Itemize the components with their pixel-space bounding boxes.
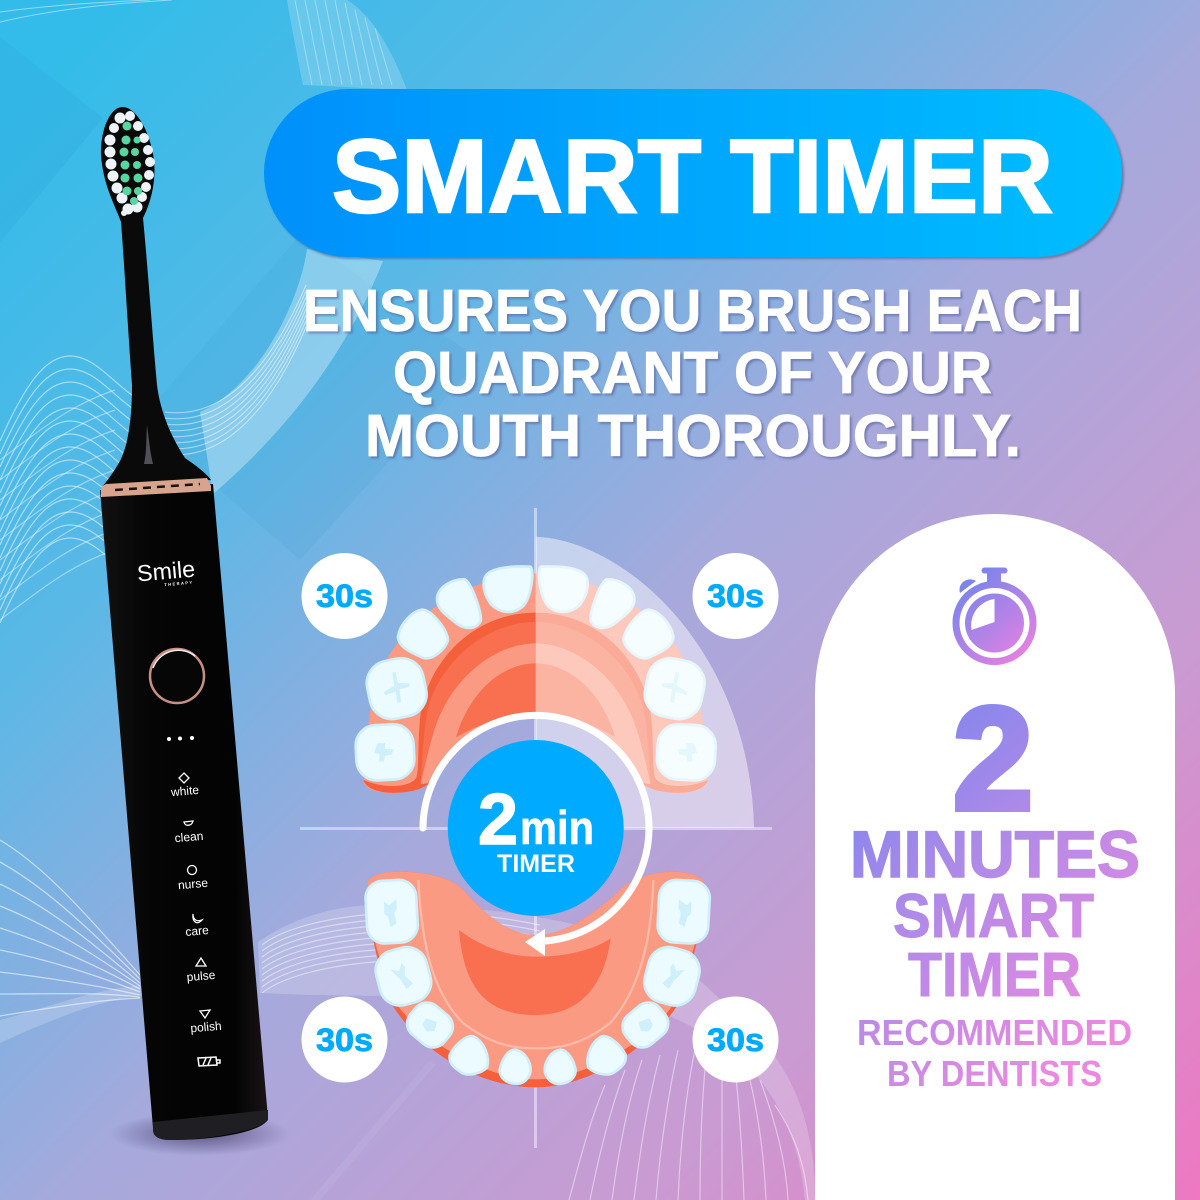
30s badge top right: 30s [707, 578, 764, 614]
center 2min timer badge: min [520, 801, 594, 854]
subtitle [303, 278, 1082, 469]
smart label: SMART [893, 882, 1094, 951]
quadrant cross lines [300, 508, 772, 1148]
subtitle: QUADRANT OF YOUR [393, 340, 992, 406]
timer ring arrow [423, 715, 649, 956]
lower teeth arch [365, 872, 711, 1087]
30s badge bottom right: 30s [707, 1022, 764, 1058]
brush shadow [110, 1112, 290, 1156]
big number 2: 2 [953, 677, 1033, 840]
title pill [264, 89, 1122, 257]
recommended label: RECOMMENDED [857, 1012, 1132, 1053]
handle [100, 484, 268, 1140]
handle base trim [153, 1110, 268, 1140]
center 2min timer badge: 2 [478, 780, 518, 860]
rose gold band [101, 478, 211, 497]
mode labels [169, 783, 222, 1035]
highlighted quadrant overlay [536, 537, 754, 828]
30s badge top right [692, 553, 778, 639]
indicator dots [167, 736, 194, 741]
toothbrush [100, 107, 290, 1156]
30s badge bottom right [692, 996, 778, 1082]
icon: stopwatch [952, 568, 1036, 665]
subtitle: MOUTH THOROUGHLY. [365, 403, 1021, 469]
center 2min timer badge: TIMER [497, 850, 575, 878]
subtitle: ENSURES YOU BRUSH EACH [303, 278, 1082, 344]
by dentists label: BY DENTISTS [887, 1053, 1102, 1094]
timer label: TIMER [908, 941, 1081, 1010]
mode labels: polish [190, 1019, 222, 1035]
neck highlight [144, 425, 153, 464]
30s badge top left [302, 553, 388, 639]
30s badge bottom left: 30s [316, 1022, 373, 1058]
logo: THERAPY [164, 580, 193, 587]
mode labels: nurse [177, 876, 209, 892]
bristles [104, 111, 155, 216]
title pill: SMART TIMER [332, 119, 1053, 235]
30s badge top left: 30s [316, 578, 373, 614]
30s badge bottom left [302, 996, 388, 1082]
power button [150, 649, 204, 703]
teeth diagram [355, 537, 754, 1087]
mode icons [179, 773, 210, 1018]
mode labels: clean [174, 829, 204, 845]
logo: Smile [136, 556, 196, 586]
brush head and neck [101, 107, 211, 486]
panel: 2 minutes smart timer [815, 514, 1175, 1200]
mode labels: care [185, 923, 210, 939]
upper teeth arch [355, 567, 717, 793]
mode labels: white [169, 783, 200, 799]
mode labels: pulse [186, 968, 216, 984]
center 2min timer badge [448, 740, 624, 916]
battery icon [198, 1057, 220, 1066]
background wave patterns [0, 0, 815, 1200]
minutes label: MINUTES [850, 817, 1140, 891]
